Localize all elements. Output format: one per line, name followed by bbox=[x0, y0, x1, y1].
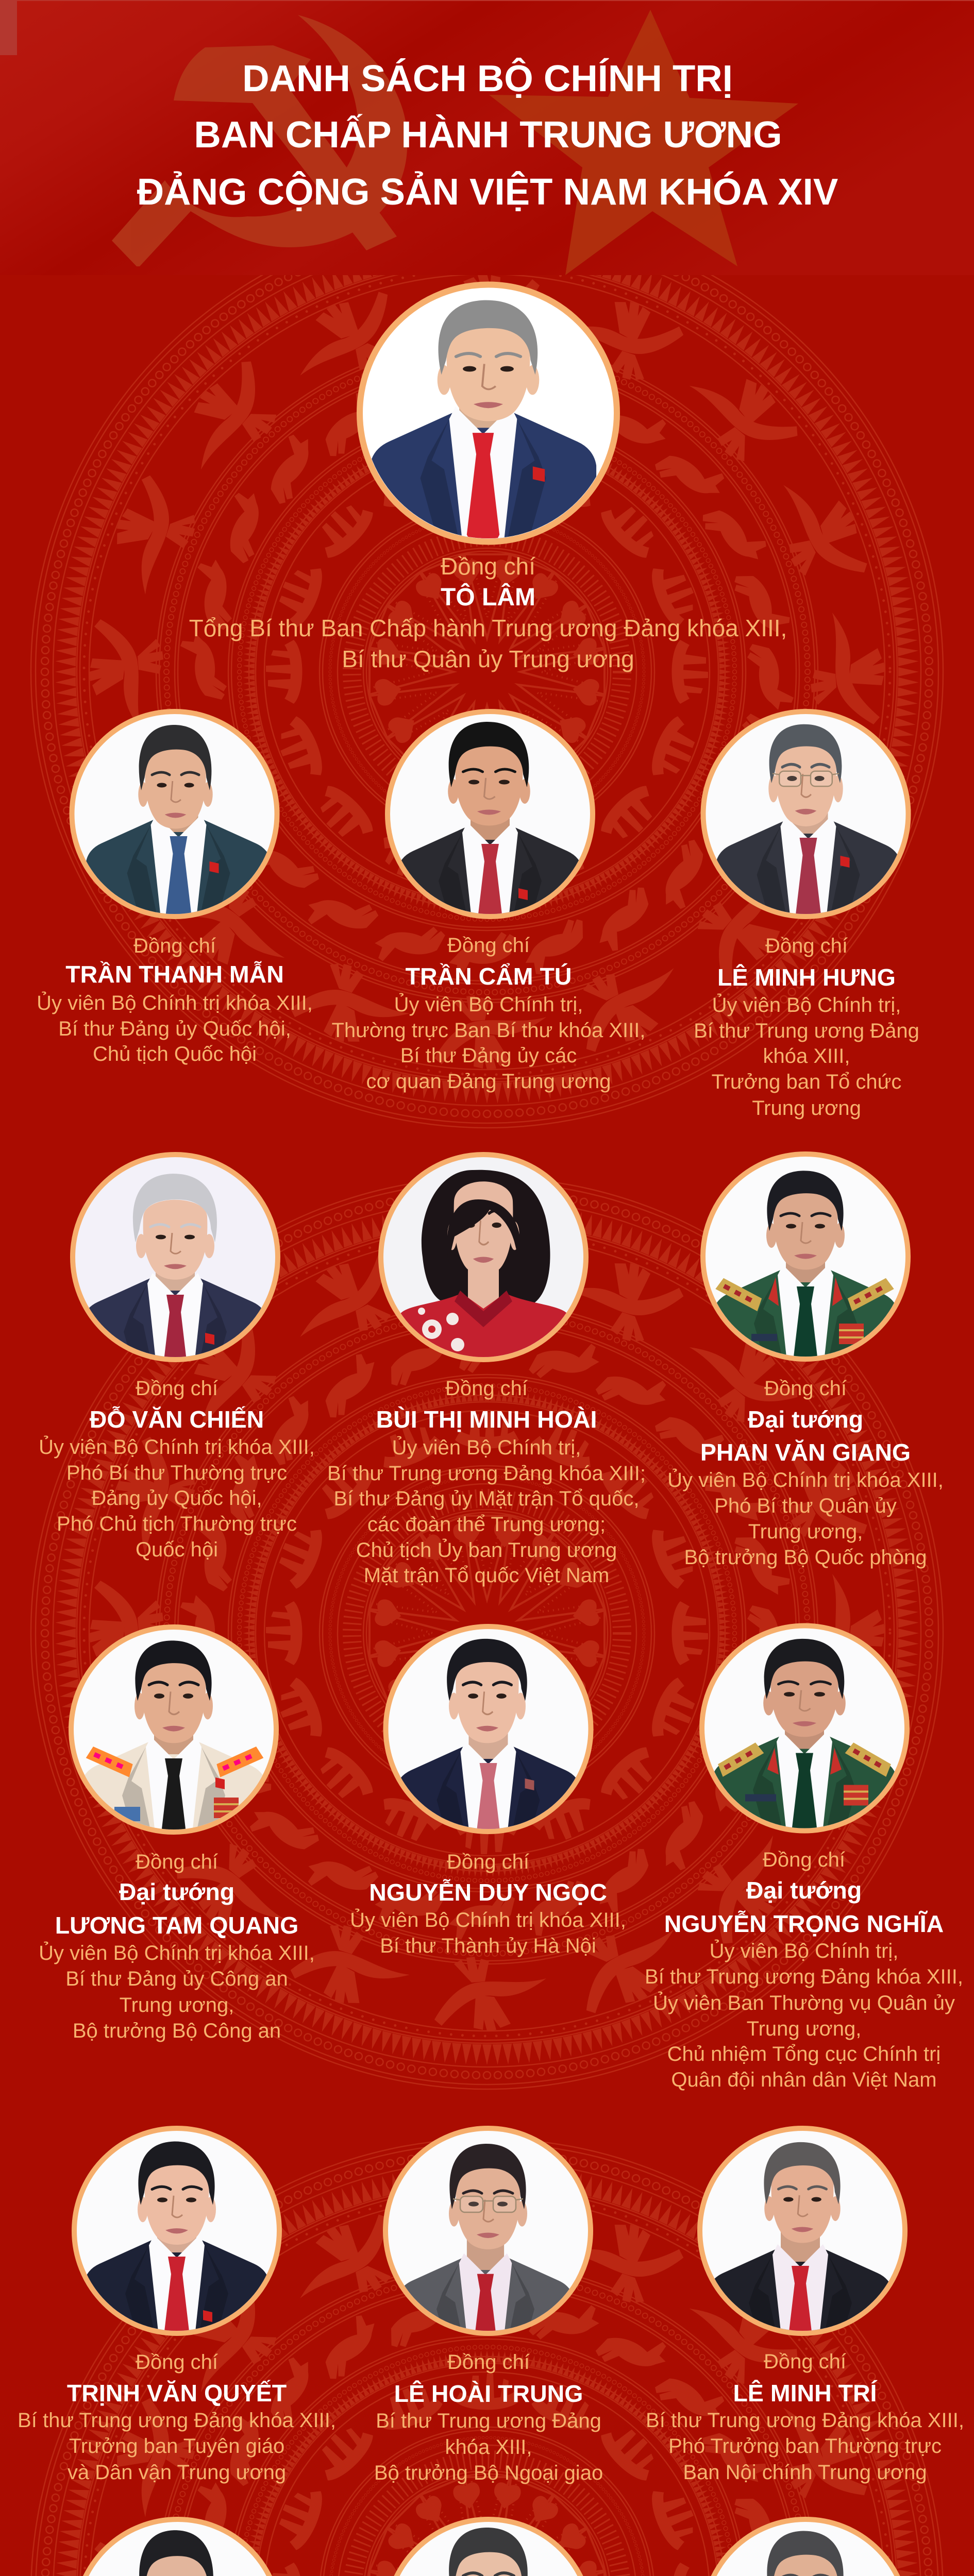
card: Trần Lưu Quang bbox=[18, 2519, 336, 2576]
card: Trịnh Văn Quyết bbox=[18, 2128, 336, 2484]
label: Đồng chí bbox=[133, 935, 216, 957]
role: Đảng ủy Quốc hội, bbox=[91, 1487, 262, 1510]
role: Bí thư Đảng ủy Quốc hội, bbox=[58, 1018, 291, 1040]
role: Thường trực Ban Bí thư khóa XIII, bbox=[331, 1019, 646, 1042]
role: Bí thư Trung ương Đảng khóa XIII, bbox=[645, 1965, 963, 1988]
role: Ủy viên Bộ Chính trị, bbox=[712, 993, 901, 1016]
role: Trung ương bbox=[752, 1097, 861, 1120]
card: Phạm Gia Túc bbox=[365, 2519, 610, 2576]
portrait: Nguyễn Trọng Nghĩa bbox=[702, 1626, 907, 1877]
role: Trưởng ban Tổ chức bbox=[712, 1071, 901, 1093]
portrait: Phạm Gia Túc bbox=[386, 2519, 591, 2576]
role: Tô Lâm: Bí thư Quân ủy Trung ương bbox=[342, 646, 634, 672]
rank: Đại tướng bbox=[746, 1877, 862, 1904]
role: Ban Nội chính Trung ương bbox=[683, 2461, 927, 2484]
role: Ủy viên Bộ Chính trị khóa XIII, bbox=[37, 991, 313, 1014]
name: BÙI THỊ MINH HOÀI bbox=[376, 1406, 597, 1433]
name: LÊ MINH HƯNG bbox=[717, 964, 896, 991]
role: Tô Lâm: Tổng Bí thư Ban Chấp hành Trung ương Đảng khóa XIII, bbox=[189, 615, 787, 641]
role: Bí thư Đảng ủy các bbox=[400, 1044, 577, 1067]
card: Lê Minh Hưng bbox=[694, 711, 919, 1120]
role: Trung ương, bbox=[747, 2018, 861, 2040]
role: Ủy viên Ban Thường vụ Quân ủy bbox=[653, 1991, 955, 2014]
card: Phan Văn Giang bbox=[667, 1154, 944, 1569]
portrait: Lương Tam Quang bbox=[71, 1627, 276, 1883]
role: Ủy viên Bộ Chính trị, bbox=[394, 992, 583, 1016]
role: Bộ trưởng Bộ Ngoại giao bbox=[374, 2462, 603, 2484]
card: Lê Minh Trí bbox=[646, 2128, 964, 2484]
title: DANH SÁCH BỘ CHÍNH TRỊ bbox=[242, 58, 733, 99]
name: PHAN VĂN GIANG bbox=[700, 1439, 911, 1466]
portrait: Đỗ Văn Chiến bbox=[73, 1155, 278, 1419]
label: Đồng chí bbox=[447, 1851, 529, 1873]
portrait: Lê Minh Hưng bbox=[703, 711, 908, 962]
bronze drum pattern: second bbox=[0, 1090, 974, 2177]
role: khóa XIII, bbox=[445, 2436, 532, 2459]
name: LÊ HOÀI TRUNG bbox=[394, 2380, 583, 2407]
flag: star bbox=[489, 10, 798, 275]
card: Trần Cẩm Tú bbox=[331, 711, 646, 1093]
card: Trần Thanh Mẫn bbox=[37, 711, 313, 1065]
role: Bộ trưởng Bộ Quốc phòng bbox=[684, 1546, 927, 1569]
portrait: Lê Hoài Trung bbox=[385, 2128, 591, 2393]
bronze drum pattern: third bbox=[0, 2051, 974, 2576]
title: BAN CHẤP HÀNH TRUNG ƯƠNG bbox=[194, 114, 782, 156]
name: ĐỖ VĂN CHIẾN bbox=[90, 1406, 264, 1433]
role: Phó Chủ tịch Thường trực bbox=[57, 1513, 297, 1535]
card: Trần Sỹ Thanh bbox=[678, 2519, 931, 2576]
role: Chủ tịch Quốc hội bbox=[93, 1043, 257, 1065]
label: Đồng chí bbox=[447, 2351, 530, 2374]
role: Phó Trưởng ban Thường trực bbox=[668, 2435, 942, 2458]
card: Đỗ Văn Chiến bbox=[39, 1155, 315, 1561]
portrait: Nguyễn Duy Ngọc bbox=[385, 1626, 591, 1888]
portrait: Trần Cẩm Tú bbox=[385, 709, 595, 919]
role: Bí thư Đảng ủy Mặt trận Tổ quốc, bbox=[333, 1487, 640, 1510]
name: LÊ MINH TRÍ bbox=[733, 2380, 878, 2406]
name: Tô Lâm: TÔ LÂM bbox=[441, 583, 535, 611]
name: TRẦN CẨM TÚ bbox=[406, 963, 572, 990]
label: Đồng chí bbox=[764, 1377, 847, 1400]
portrait: Trần Sỹ Thanh bbox=[703, 2519, 908, 2576]
role: và Dân vận Trung ương bbox=[68, 2461, 286, 2484]
role: Trung ương, bbox=[748, 1520, 863, 1543]
role: Quân đội nhân dân Việt Nam bbox=[671, 2069, 937, 2091]
role: Bí thư Trung ương Đảng khóa XIII, bbox=[18, 2409, 336, 2432]
card: Nguyễn Trọng Nghĩa bbox=[645, 1626, 963, 2091]
role: Bí thư Đảng ủy Công an bbox=[65, 1968, 288, 1990]
card: Lương Tam Quang bbox=[39, 1627, 315, 2042]
label: Đồng chí bbox=[763, 1849, 845, 1871]
bronze drum pattern: first bbox=[0, 128, 974, 1215]
label: Đồng chí bbox=[764, 2350, 846, 2373]
card: Bùi Thị Minh Hoài bbox=[327, 1155, 646, 1587]
label: Đồng chí bbox=[447, 934, 530, 957]
card: Tô Lâm bbox=[189, 284, 787, 672]
portrait: Trần Thanh Mẫn bbox=[69, 709, 279, 919]
role: các đoàn thể Trung ương; bbox=[367, 1513, 606, 1536]
role: Bí thư Thành ủy Hà Nội bbox=[380, 1935, 596, 1957]
portrait: Tô Lâm bbox=[357, 281, 620, 545]
role: Ủy viên Bộ Chính trị khóa XIII, bbox=[667, 1468, 944, 1492]
role: Ủy viên Bộ Chính trị khóa XIII, bbox=[39, 1941, 315, 1964]
role: Bộ trưởng Bộ Công an bbox=[73, 2020, 281, 2042]
role: Ủy viên Bộ Chính trị khóa XIII, bbox=[39, 1435, 315, 1459]
role: Ủy viên Bộ Chính trị, bbox=[392, 1435, 581, 1459]
card: Nguyễn Duy Ngọc bbox=[350, 1626, 626, 1957]
role: Trung ương, bbox=[120, 1994, 234, 2016]
label: Đồng chí bbox=[136, 1851, 218, 1873]
role: cơ quan Đảng Trung ương bbox=[366, 1070, 611, 1093]
rank: Đại tướng bbox=[119, 1878, 234, 1905]
rank: Đại tướng bbox=[748, 1406, 863, 1433]
portrait: Lê Minh Trí bbox=[700, 2128, 905, 2391]
portrait: Bùi Thị Minh Hoài bbox=[381, 1155, 586, 1376]
flag: hammer and sickle bbox=[112, 15, 408, 266]
role: Trưởng ban Tuyên giáo bbox=[69, 2435, 284, 2458]
role: Ủy viên Bộ Chính trị, bbox=[710, 1939, 898, 1962]
role: khóa XIII, bbox=[763, 1045, 850, 1067]
role: Chủ nhiệm Tổng cục Chính trị bbox=[667, 2043, 941, 2065]
portrait: Trần Lưu Quang bbox=[75, 2519, 280, 2576]
role: Bí thư Trung ương Đảng khóa XIII, bbox=[646, 2409, 964, 2432]
role: Phó Bí thư Quân ủy bbox=[714, 1495, 897, 1517]
portrait: Phan Văn Giang bbox=[703, 1154, 908, 1411]
portrait: Trịnh Văn Quyết bbox=[74, 2128, 279, 2381]
label: Đồng chí bbox=[136, 1377, 218, 1400]
label: Đồng chí bbox=[445, 1377, 528, 1400]
role: Bí thư Trung ương Đảng bbox=[694, 1020, 919, 1042]
role: Ủy viên Bộ Chính trị khóa XIII, bbox=[350, 1908, 626, 1931]
label: Đồng chí bbox=[765, 935, 848, 957]
role: Phó Bí thư Thường trực bbox=[66, 1462, 287, 1484]
role: Bí thư Trung ương Đảng bbox=[376, 2410, 601, 2432]
role: Mặt trận Tổ quốc Việt Nam bbox=[364, 1564, 609, 1587]
label: Đồng chí: Đồng chí bbox=[441, 553, 535, 580]
role: Quốc hội bbox=[136, 1538, 218, 1561]
title: ĐẢNG CỘNG SẢN VIỆT NAM KHÓA XIV bbox=[137, 171, 838, 213]
role: Bí thư Trung ương Đảng khóa XIII; bbox=[327, 1462, 646, 1485]
label: Đồng chí bbox=[136, 2351, 218, 2374]
name: LƯƠNG TAM QUANG bbox=[55, 1912, 298, 1939]
role: Chủ tịch Ủy ban Trung ương bbox=[356, 1538, 617, 1562]
name: TRẦN THANH MẪN bbox=[65, 961, 284, 988]
name: NGUYỄN DUY NGỌC bbox=[369, 1879, 607, 1906]
name: TRỊNH VĂN QUYẾT bbox=[67, 2380, 287, 2406]
name: NGUYỄN TRỌNG NGHĨA bbox=[664, 1910, 944, 1937]
card: Lê Hoài Trung bbox=[374, 2128, 603, 2484]
header flag panel bbox=[0, 0, 974, 275]
